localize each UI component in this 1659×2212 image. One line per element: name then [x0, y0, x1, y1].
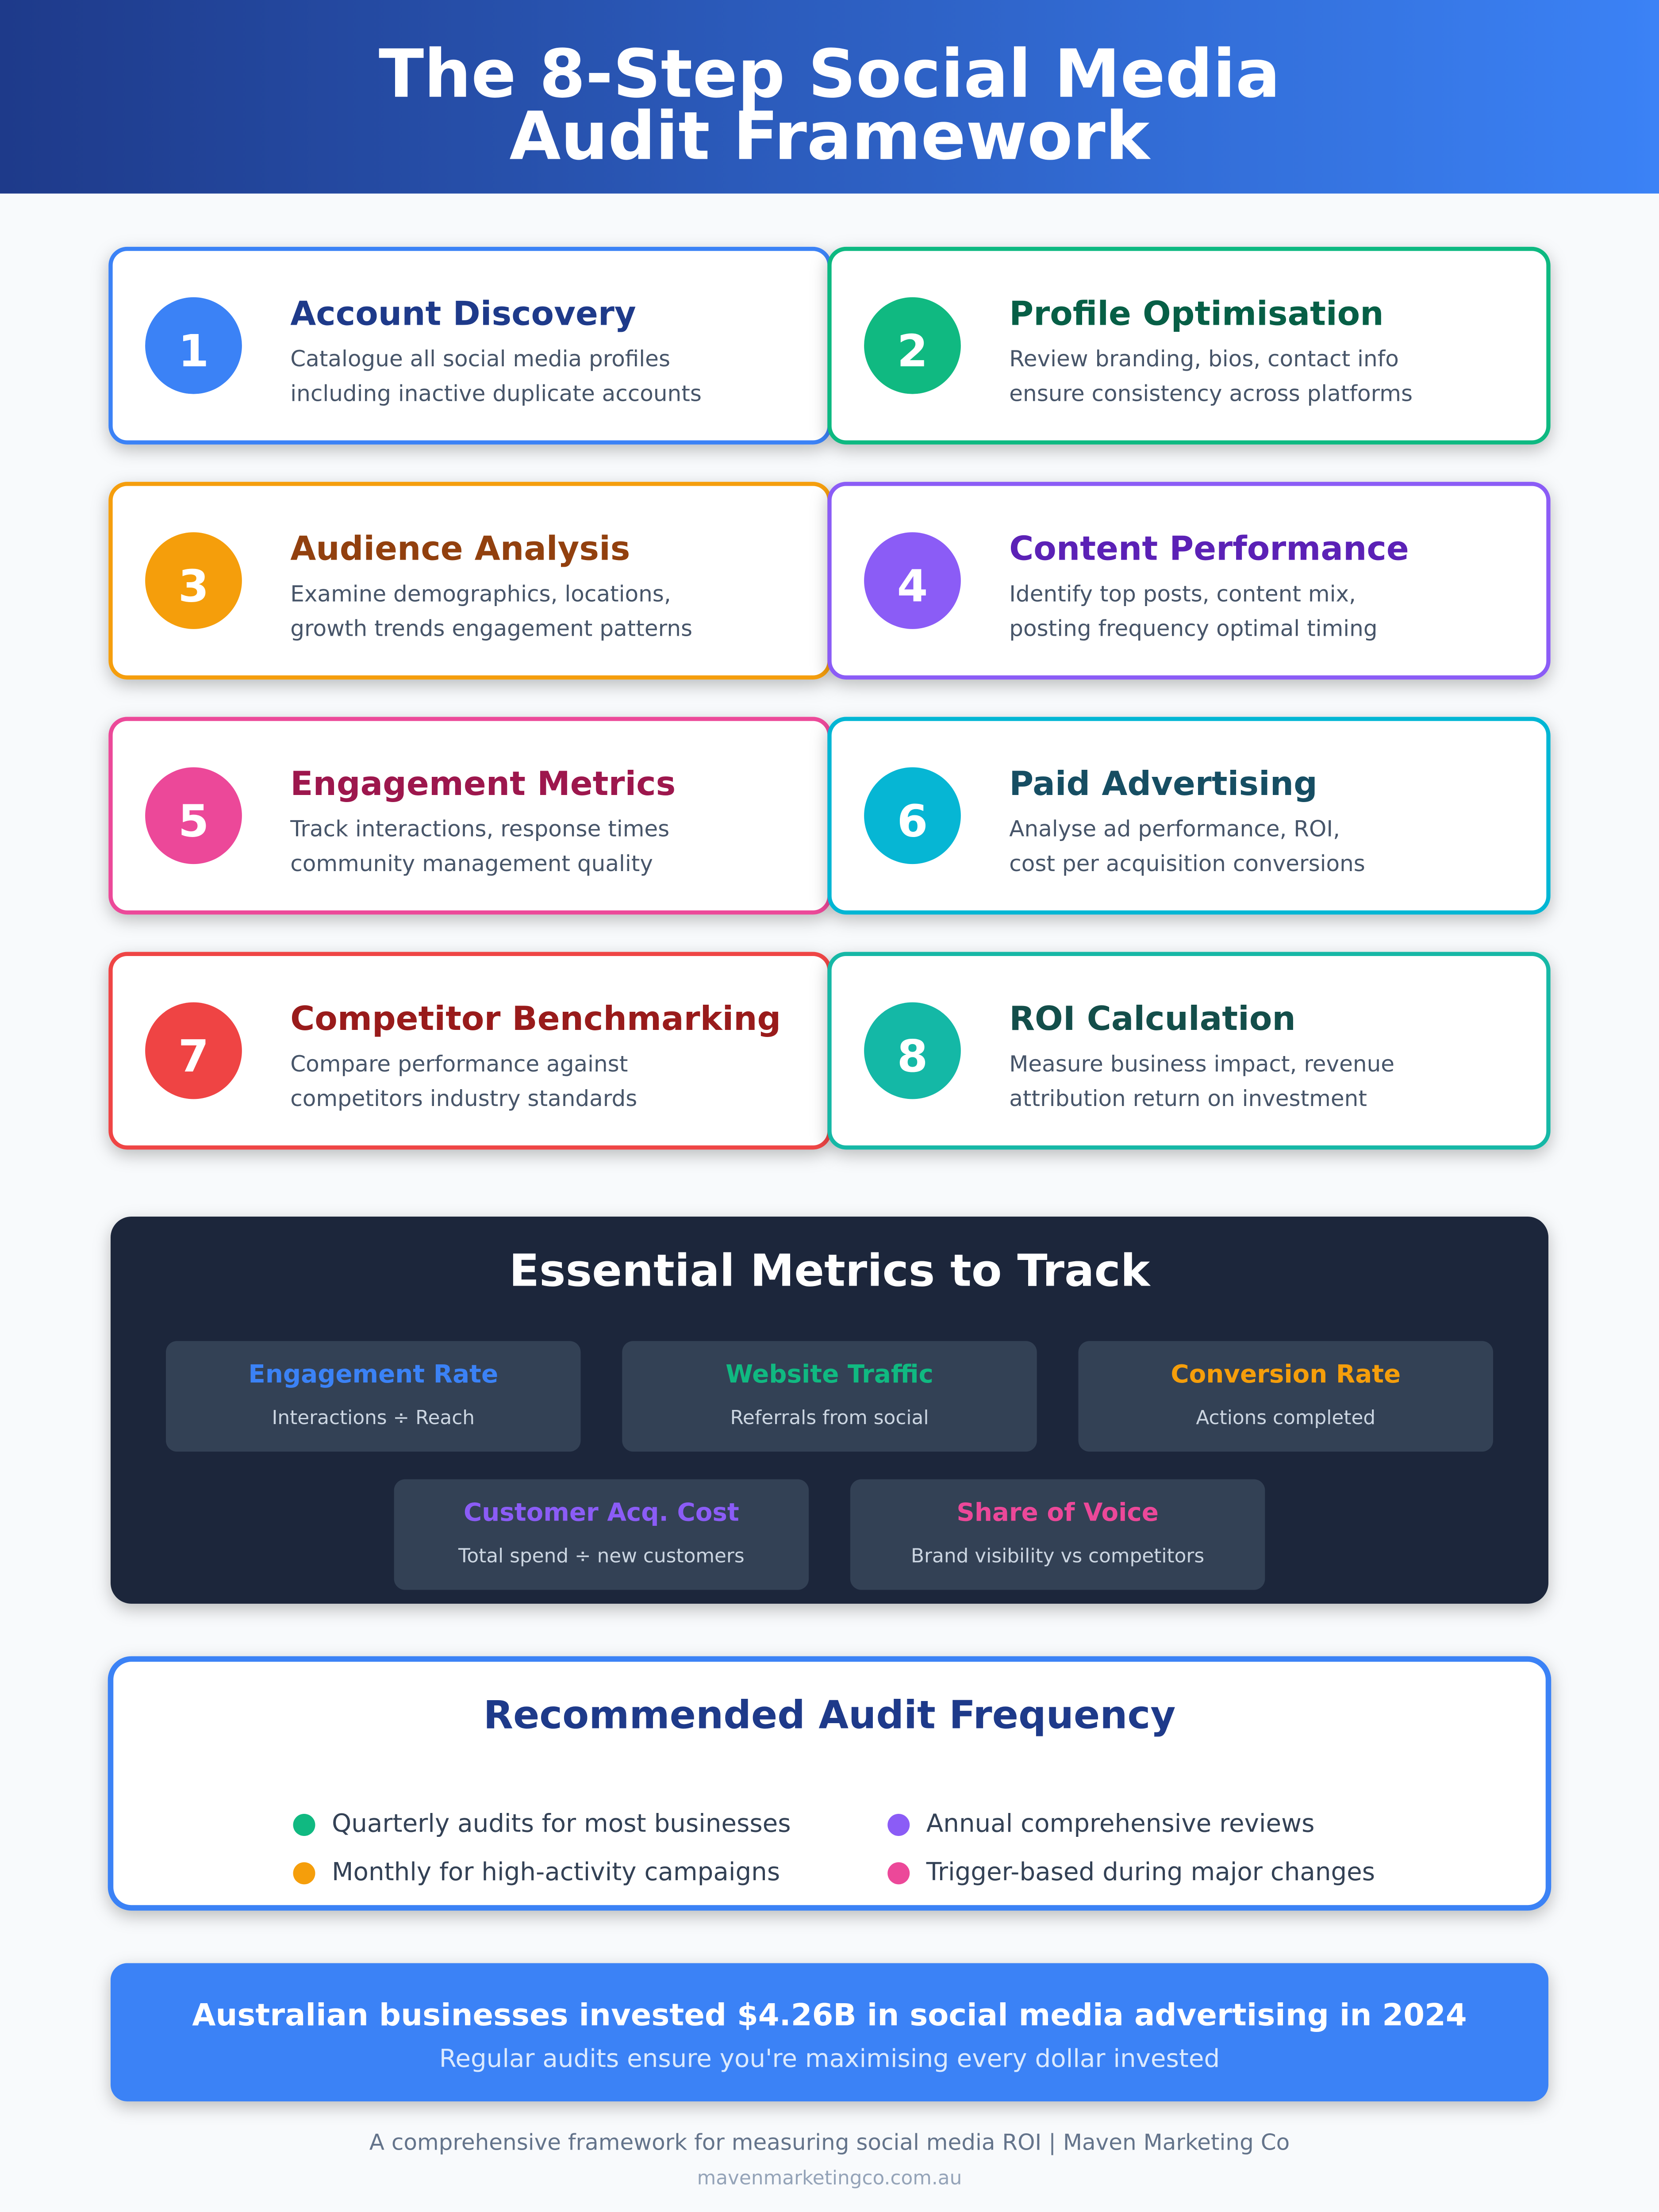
metric: share of voice: Share of Voice	[956, 1498, 1159, 1527]
step 6 card: Paid Advertising: cost per acquisition conversions	[1009, 851, 1365, 876]
metric: website traffic: Referrals from social	[730, 1406, 929, 1429]
metric: website traffic	[622, 1341, 1037, 1452]
step 8 card: ROI Calculation	[830, 954, 1548, 1148]
step 7 card: Competitor Benchmarking: Competitor Benchmarking	[290, 999, 781, 1038]
metric: customer acquisition cost	[394, 1479, 809, 1590]
frequency item: quarterly: Quarterly audits for most businesses	[332, 1809, 791, 1838]
header banner: Audit Framework	[509, 98, 1151, 175]
step 6 card: Paid Advertising	[830, 719, 1548, 912]
step 1 card: Account Discovery	[111, 249, 830, 442]
frequency item: monthly: Monthly for high-activity campaigns	[332, 1858, 780, 1886]
metric: share of voice: Brand visibility vs competitors	[911, 1544, 1204, 1567]
metric: engagement rate	[166, 1341, 580, 1452]
step 5 card: Engagement Metrics	[111, 719, 830, 912]
panel: audit frequency	[111, 1659, 1548, 1908]
step 5 card: Engagement Metrics: community management quality	[290, 851, 653, 876]
step 4 card: Content Performance: Content Performance	[1009, 529, 1409, 568]
step 3 card: Audience Analysis: 3	[178, 560, 209, 612]
metric: engagement rate: Interactions ÷ Reach	[272, 1406, 475, 1429]
metric: website traffic: Website Traffic	[726, 1360, 933, 1389]
step 5 card: Engagement Metrics: 5	[178, 795, 209, 847]
step 3 card: Audience Analysis: Audience Analysis	[290, 529, 630, 568]
step 1 card: Account Discovery: 1	[178, 325, 209, 377]
metric: customer acquisition cost: Customer Acq. Cost	[464, 1498, 739, 1527]
step 6 card: Paid Advertising: 6	[897, 795, 928, 847]
footer url: mavenmarketingco.com.au	[697, 2166, 962, 2189]
metric: conversion rate	[1079, 1341, 1493, 1452]
frequency item: trigger-based: Trigger-based during major changes	[926, 1858, 1375, 1886]
step 3 card: Audience Analysis: Examine demographics, locations,	[290, 581, 671, 607]
callout: investment banner: Regular audits ensure you're maximising every dollar invested	[439, 2044, 1220, 2073]
step 8 card: ROI Calculation: 8	[897, 1030, 928, 1082]
footer text: A comprehensive framework for measuring social media ROI | Maven Marketing Co	[369, 2129, 1290, 2155]
step 1 card: Account Discovery: Account Discovery	[290, 294, 636, 333]
step 5 card: Engagement Metrics: Engagement Metrics	[290, 764, 676, 803]
step 6 card: Paid Advertising: Analyse ad performance, ROI,	[1009, 816, 1340, 842]
step 7 card: Competitor Benchmarking	[111, 954, 830, 1148]
step 2 card: Profile Optimisation: ensure consistency across platforms	[1009, 380, 1413, 406]
step 6 card: Paid Advertising: Paid Advertising	[1009, 764, 1317, 803]
step 3 card: Audience Analysis	[111, 484, 830, 677]
title: The 8-Step Social Media	[379, 36, 1280, 113]
metric: conversion rate: Conversion Rate	[1171, 1360, 1401, 1389]
step 8 card: ROI Calculation: Measure business impact, revenue	[1009, 1051, 1394, 1077]
frequency heading: Recommended Audit Frequency	[484, 1692, 1175, 1737]
metrics heading: Essential Metrics to Track	[509, 1244, 1151, 1296]
callout: investment banner: Australian businesses invested $4.26B in social media advertising in 2024	[192, 1997, 1467, 2033]
metric: share of voice	[850, 1479, 1265, 1590]
step 2 card: Profile Optimisation: 2	[897, 325, 928, 377]
step 8 card: ROI Calculation: ROI Calculation	[1009, 999, 1296, 1038]
step 5 card: Engagement Metrics: Track interactions, response times	[290, 816, 669, 842]
step 3 card: Audience Analysis: growth trends engagement patterns	[290, 615, 692, 641]
step 7 card: Competitor Benchmarking: competitors industry standards	[290, 1086, 637, 1111]
step 2 card: Profile Optimisation: Review branding, bios, contact info	[1009, 346, 1399, 372]
step 8 card: ROI Calculation: attribution return on investment	[1009, 1086, 1367, 1111]
frequency item: annual: Annual comprehensive reviews	[926, 1809, 1314, 1838]
step 1 card: Account Discovery: Catalogue all social media profiles	[290, 346, 670, 372]
step 2 card: Profile Optimisation: Profile Optimisation	[1009, 294, 1384, 333]
step 4 card: Content Performance: 4	[897, 560, 928, 612]
step 7 card: Competitor Benchmarking: Compare performance against	[290, 1051, 628, 1077]
step 7 card: Competitor Benchmarking: 7	[178, 1030, 209, 1082]
callout: investment banner	[111, 1963, 1548, 2101]
header banner	[0, 0, 1659, 194]
metric: engagement rate: Engagement Rate	[248, 1360, 498, 1389]
step 1 card: Account Discovery: including inactive duplicate accounts	[290, 380, 702, 406]
step 4 card: Content Performance: posting frequency optimal timing	[1009, 615, 1378, 641]
metric: conversion rate: Actions completed	[1196, 1406, 1375, 1429]
step 4 card: Content Performance: Identify top posts, content mix,	[1009, 581, 1356, 607]
step 2 card: Profile Optimisation	[830, 249, 1548, 442]
step 4 card: Content Performance	[830, 484, 1548, 677]
metric: customer acquisition cost: Total spend ÷ new customers	[458, 1544, 745, 1567]
panel: essential metrics	[111, 1217, 1548, 1604]
